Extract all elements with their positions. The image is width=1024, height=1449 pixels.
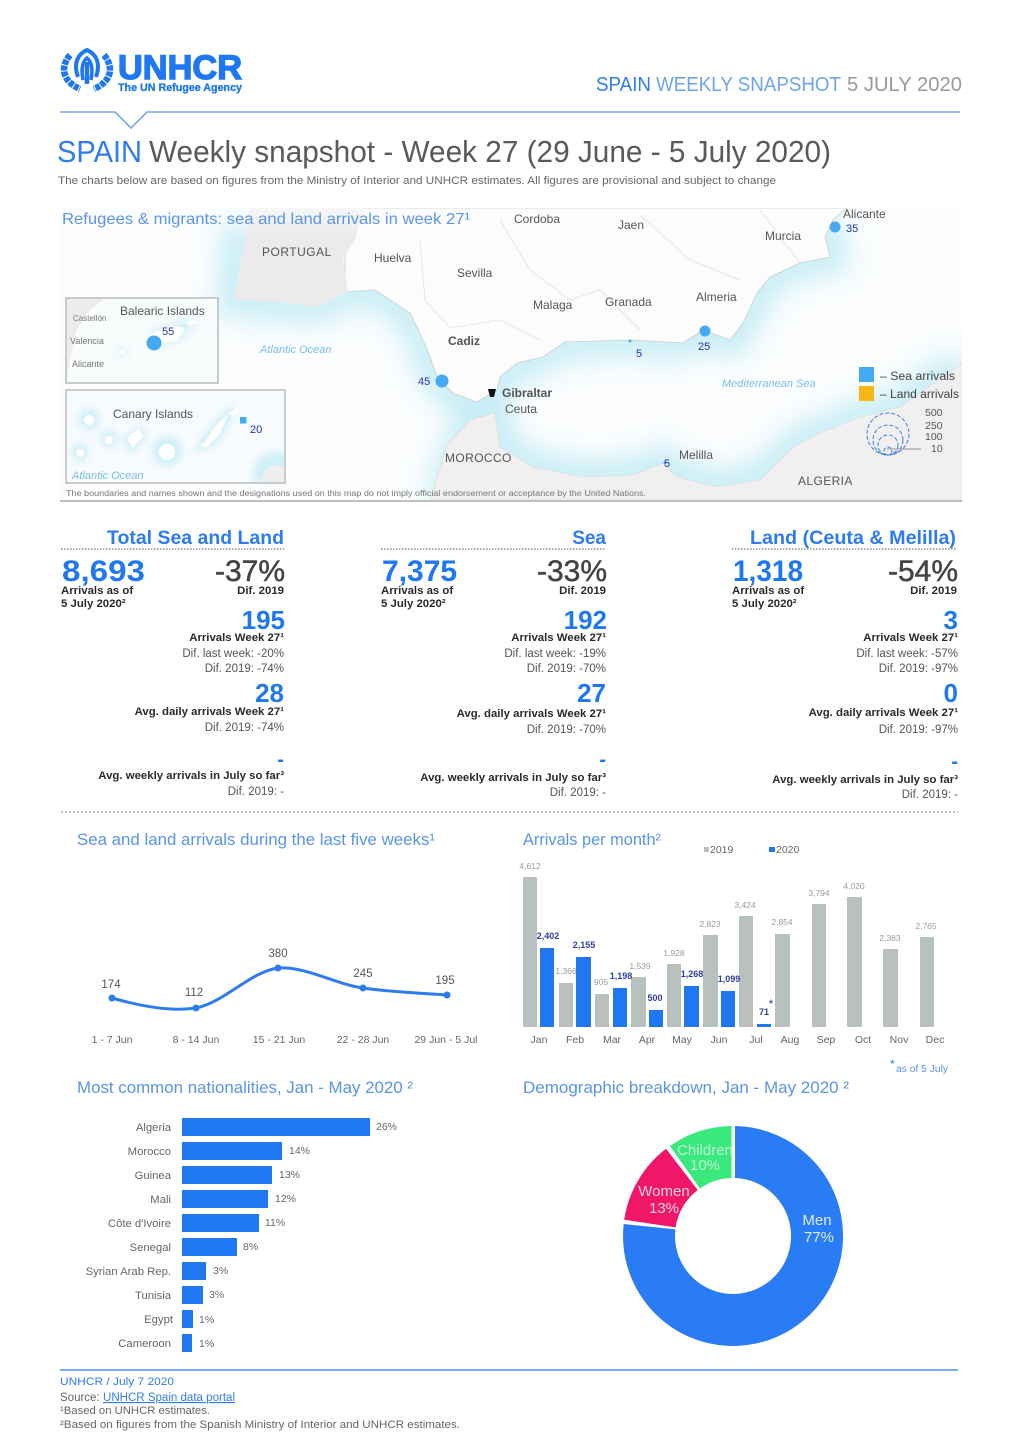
country labels xyxy=(86,1122,174,1350)
week labels: 15 - 21 Jun xyxy=(253,1034,305,1046)
inset: Balearic Islands: 55 xyxy=(162,326,174,338)
bars xyxy=(182,1118,370,1352)
total arrivals: Arrivals as of xyxy=(61,585,133,597)
difference with 2019: Dif. 2019 xyxy=(910,585,957,597)
donut labels: 10% xyxy=(690,1157,720,1174)
average daily arrivals: 0 xyxy=(944,678,958,708)
map legend: 500 xyxy=(925,407,943,419)
percentages: 13% xyxy=(279,1169,300,1181)
header tag: report name and date: WEEKLY SNAPSHOT xyxy=(656,74,841,96)
values 2019: 3,424 xyxy=(734,900,756,910)
land: North Africa xyxy=(430,363,962,500)
weekly arrivals: Dif. last week: -20% xyxy=(182,648,284,660)
panel: sea xyxy=(381,528,607,799)
donut segment: men xyxy=(623,1126,843,1346)
map legend: 100 xyxy=(925,431,943,443)
values: 112 xyxy=(185,987,203,999)
inset: Canary Islands: Atlantic Ocean xyxy=(71,470,144,482)
arrival numbers: 5 xyxy=(636,348,642,360)
panel: total sea and land xyxy=(61,528,285,798)
values xyxy=(101,948,455,999)
map labels: countries and cities xyxy=(259,207,886,488)
total arrivals: 5 July 2020² xyxy=(61,598,126,610)
values: 245 xyxy=(353,968,373,980)
values 2020: 500 xyxy=(647,993,663,1003)
values: 174 xyxy=(101,979,121,991)
map labels: countries and cities: MOROCCO xyxy=(445,451,512,465)
header rule with notch xyxy=(60,112,960,128)
logo wordmark: UNHCR xyxy=(118,49,242,87)
total arrivals xyxy=(732,555,804,610)
difference with 2019: Dif. 2019 xyxy=(559,585,606,597)
total arrivals: Arrivals as of xyxy=(381,585,453,597)
values 2019: 1,539 xyxy=(629,961,651,971)
week labels: 29 Jun - 5 Jul xyxy=(414,1034,478,1046)
average weekly arrivals: Avg. weekly arrivals in July so far³ xyxy=(98,770,284,782)
icon: Gibraltar marker xyxy=(488,389,496,397)
values 2020: 71 xyxy=(759,1007,769,1017)
average daily arrivals: Avg. daily arrivals Week 27¹ xyxy=(135,706,284,718)
weekly arrivals xyxy=(182,605,285,675)
map labels: countries and cities: Murcia xyxy=(765,229,801,243)
panel: land xyxy=(732,528,958,801)
week labels: 22 - 28 Jun xyxy=(337,1034,389,1046)
inset: Canary Islands: 20 xyxy=(250,424,262,436)
total arrivals: 7,375 xyxy=(382,555,457,588)
difference with 2019: Dif. 2019 xyxy=(237,585,284,597)
map legend: – Land arrivals xyxy=(880,389,959,401)
percentages: 3% xyxy=(213,1265,228,1277)
heading: Sea and land arrivals during the last five weeks¹ xyxy=(77,830,435,849)
country labels: Mali xyxy=(150,1194,171,1206)
average weekly arrivals: Avg. weekly arrivals in July so far³ xyxy=(772,774,958,786)
percentages: 12% xyxy=(275,1193,296,1205)
bars 2019 xyxy=(523,877,934,1027)
average daily arrivals: 27 xyxy=(577,678,606,708)
country labels: Egypt xyxy=(144,1314,174,1326)
heading: Demographic breakdown, Jan - May 2020 ² xyxy=(523,1078,849,1097)
percentages: 1% xyxy=(199,1338,214,1350)
weekly arrivals xyxy=(504,605,607,675)
values 2020: 2,402 xyxy=(537,931,559,941)
percentages: 14% xyxy=(289,1145,310,1157)
weekly arrivals: 192 xyxy=(564,605,607,635)
month labels: Jan xyxy=(531,1034,548,1046)
month labels xyxy=(531,1034,944,1046)
week labels: 8 - 14 Jun xyxy=(173,1034,220,1046)
panel: map of sea and land arrivals xyxy=(60,207,962,501)
values 2019: 4,020 xyxy=(843,881,865,891)
map labels: countries and cities: PORTUGAL xyxy=(262,245,332,259)
map labels: countries and cities: Cadiz xyxy=(448,334,480,348)
heading: Land (Ceuta & Melilla) xyxy=(750,528,956,549)
chart: most common nationalities xyxy=(77,1078,413,1352)
total arrivals: 5 July 2020² xyxy=(732,598,797,610)
country labels: Morocco xyxy=(128,1146,171,1158)
chart: arrivals per month xyxy=(519,830,948,1075)
donut labels: Men xyxy=(802,1212,832,1229)
country labels: Tunisia xyxy=(135,1290,172,1302)
country labels: Cameroon xyxy=(118,1338,171,1350)
weekly arrivals: Dif. 2019: -70% xyxy=(527,663,606,675)
logo tagline: The UN Refugee Agency xyxy=(118,82,243,94)
map labels: countries and cities: Melilla xyxy=(679,448,713,462)
map labels: countries and cities: Almeria xyxy=(696,290,737,304)
UNHCR logo xyxy=(64,49,243,94)
values 2020: 1,268 xyxy=(681,969,703,979)
percentages: 11% xyxy=(265,1217,285,1229)
month labels: Apr xyxy=(639,1034,656,1046)
weekly arrivals: Dif. last week: -19% xyxy=(504,648,606,660)
arrival numbers xyxy=(418,223,858,470)
map labels: countries and cities: Granada xyxy=(605,295,652,309)
country labels: Côte d'Ivoire xyxy=(108,1218,171,1230)
values 2020: 2,155 xyxy=(573,940,595,950)
average daily arrivals xyxy=(457,678,606,736)
title: Weekly snapshot - Week 27 (29 June - 5 July 2020) xyxy=(149,134,831,169)
values 2019: 4,612 xyxy=(519,861,541,871)
average daily arrivals: 28 xyxy=(255,678,284,708)
values 2019: 2,854 xyxy=(771,917,793,927)
total arrivals: Arrivals as of xyxy=(732,585,804,597)
percentages: 1% xyxy=(199,1314,214,1326)
values 2019: 3,794 xyxy=(808,888,830,898)
inset: Canary Islands xyxy=(66,390,290,483)
percentages: 3% xyxy=(209,1289,224,1301)
footer credit: UNHCR / July 7 2020 xyxy=(60,1376,174,1388)
month labels: Jul xyxy=(749,1034,763,1046)
map legend: 250 xyxy=(925,420,943,432)
chart: demographic breakdown xyxy=(523,1078,849,1346)
weekly arrivals: Arrivals Week 27¹ xyxy=(863,632,958,644)
map labels: countries and cities: Sevilla xyxy=(457,266,493,280)
inset: Balearic Islands: Balearic Islands xyxy=(120,304,205,318)
values 2020: * xyxy=(769,997,774,1011)
map labels: countries and cities: Mediterranean Sea xyxy=(722,378,816,390)
total arrivals: 1,318 xyxy=(733,555,803,588)
average weekly arrivals: Avg. weekly arrivals in July so far³ xyxy=(420,772,606,784)
inset: Balearic Islands xyxy=(66,298,218,383)
average weekly arrivals: Dif. 2019: - xyxy=(902,789,958,801)
average daily arrivals xyxy=(135,678,284,734)
map labels: countries and cities: Atlantic Ocean xyxy=(259,344,332,356)
total arrivals xyxy=(381,555,457,610)
values: 380 xyxy=(268,948,288,960)
weekly arrivals: 3 xyxy=(944,605,958,635)
difference with 2019: -54% xyxy=(888,555,958,588)
header tag: report name and date: 5 JULY 2020 xyxy=(847,74,962,96)
map labels: countries and cities: ALGERIA xyxy=(798,474,853,488)
donut labels: Children xyxy=(677,1142,733,1159)
average weekly arrivals: - xyxy=(951,751,958,773)
inset: Balearic Islands: Castellón xyxy=(73,314,106,323)
map labels: countries and cities: Jaen xyxy=(618,218,644,232)
bars 2020 xyxy=(540,948,771,1027)
percentages: 26% xyxy=(376,1121,397,1133)
map disclaimer: The boundaries and names shown and the designations used on this map do not imply official endorsement or acceptance by the United Nations. xyxy=(66,489,646,498)
map labels: countries and cities: Malaga xyxy=(533,298,573,312)
difference with 2019: -37% xyxy=(215,555,285,588)
values 2019: 1,366 xyxy=(555,966,577,976)
average daily arrivals: Dif. 2019: -97% xyxy=(879,724,958,736)
values 2019: 2,765 xyxy=(915,921,937,931)
difference with 2019: -33% xyxy=(537,555,607,588)
donut labels: 13% xyxy=(649,1200,679,1217)
map legend: – Sea arrivals xyxy=(880,371,955,383)
average weekly arrivals xyxy=(420,749,606,799)
subtitle: The charts below are based on figures from the Ministry of Interior and UNHCR estimates. All figures are provisional and subject to change xyxy=(58,175,776,187)
legend xyxy=(704,844,800,856)
weekly arrivals xyxy=(856,605,958,675)
arrival markers xyxy=(436,222,840,464)
average daily arrivals: Avg. daily arrivals Week 27¹ xyxy=(457,708,606,720)
values 2020: 1,099 xyxy=(718,974,740,984)
land: Portugal xyxy=(234,208,363,307)
total arrivals xyxy=(61,555,145,610)
month labels: Aug xyxy=(781,1034,799,1046)
values 2020 xyxy=(537,931,774,1017)
footer source: UNHCR Spain data portal xyxy=(103,1392,235,1404)
average weekly arrivals xyxy=(772,751,958,801)
country labels: Syrian Arab Rep. xyxy=(86,1266,171,1278)
heading: Arrivals per month² xyxy=(523,830,661,849)
weekly arrivals: Dif. 2019: -74% xyxy=(205,663,284,675)
map labels: countries and cities: Cordoba xyxy=(514,212,560,226)
chart: arrivals during the last five weeks xyxy=(77,830,478,1046)
donut labels: Women xyxy=(638,1183,690,1200)
month labels: Feb xyxy=(566,1034,584,1046)
arrival numbers: 45 xyxy=(418,376,430,388)
average daily arrivals: Avg. daily arrivals Week 27¹ xyxy=(809,707,958,719)
footnote 1: ¹Based on UNHCR estimates. xyxy=(60,1405,210,1417)
weekly arrivals: 195 xyxy=(242,605,285,635)
heading: Sea xyxy=(572,528,606,549)
average daily arrivals: Dif. 2019: -70% xyxy=(527,724,606,736)
values 2020: 1,198 xyxy=(610,971,632,981)
map legend: 10 xyxy=(931,443,943,455)
land: Spain xyxy=(345,208,847,402)
month labels: Jun xyxy=(711,1034,728,1046)
values: 195 xyxy=(435,975,455,987)
weekly arrivals: Arrivals Week 27¹ xyxy=(511,632,606,644)
week labels: 1 - 7 Jun xyxy=(92,1034,133,1046)
header tag: report name and date xyxy=(596,74,962,96)
line xyxy=(112,968,447,1009)
map labels: countries and cities: Alicante xyxy=(843,207,886,221)
donut labels xyxy=(638,1142,834,1246)
arrival numbers: 25 xyxy=(698,341,710,353)
header tag: report name and date: SPAIN xyxy=(596,74,651,96)
weekly arrivals: Arrivals Week 27¹ xyxy=(189,632,284,644)
values 2019 xyxy=(519,861,937,987)
donut segment: women xyxy=(624,1149,698,1227)
icon: UNHCR emblem xyxy=(64,50,110,89)
legend: 2019 xyxy=(710,844,734,856)
inset: Balearic Islands: Valencia xyxy=(70,336,104,346)
average weekly arrivals: Dif. 2019: - xyxy=(550,787,606,799)
values 2019: 2,383 xyxy=(879,933,901,943)
note: * xyxy=(890,1057,895,1071)
total arrivals: 5 July 2020² xyxy=(381,598,446,610)
donut labels: 77% xyxy=(804,1229,834,1246)
average weekly arrivals: Dif. 2019: - xyxy=(228,786,284,798)
percentages xyxy=(199,1121,397,1350)
note: as of 5 July xyxy=(896,1064,948,1075)
values 2019: 1,928 xyxy=(663,948,685,958)
inset: Balearic Islands: Alicante xyxy=(72,359,104,369)
inset: Canary Islands: Canary Islands xyxy=(113,407,193,421)
month labels: Mar xyxy=(603,1034,622,1046)
country labels: Algeria xyxy=(136,1122,172,1134)
week labels xyxy=(92,1034,478,1046)
heading: Most common nationalities, Jan - May 2020 ² xyxy=(77,1078,413,1097)
month labels: Oct xyxy=(855,1034,871,1046)
values 2019: 905 xyxy=(594,977,608,987)
map legend xyxy=(859,367,959,455)
weekly arrivals: Dif. 2019: -97% xyxy=(879,663,958,675)
month labels: Nov xyxy=(890,1034,909,1046)
month labels: Dec xyxy=(926,1034,944,1046)
arrival numbers: 35 xyxy=(846,223,858,235)
average daily arrivals xyxy=(809,678,958,736)
arrival numbers: 5 xyxy=(664,458,670,470)
country labels: Senegal xyxy=(130,1242,171,1254)
month labels: May xyxy=(672,1034,693,1046)
average weekly arrivals: - xyxy=(599,749,606,771)
average weekly arrivals xyxy=(98,749,284,798)
average daily arrivals: Dif. 2019: -74% xyxy=(205,722,284,734)
percentages: 8% xyxy=(243,1241,258,1253)
map title: Refugees & migrants: sea and land arrivals in week 27¹ xyxy=(62,211,470,228)
internal province borders xyxy=(420,210,800,340)
map labels: countries and cities: Gibraltar xyxy=(502,386,552,400)
average weekly arrivals: - xyxy=(277,749,284,771)
map labels: countries and cities: Huelva xyxy=(374,251,412,265)
donut segment: children xyxy=(670,1126,732,1188)
footnote 2: ²Based on figures from the Spanish Ministry of Interior and UNHCR estimates. xyxy=(60,1419,460,1431)
heading: Total Sea and Land xyxy=(107,528,284,549)
footer source: Source: xyxy=(60,1392,100,1404)
country labels: Guinea xyxy=(135,1170,172,1182)
legend: 2020 xyxy=(776,844,800,856)
map labels: countries and cities: Ceuta xyxy=(505,402,537,416)
title: SPAIN xyxy=(57,134,142,169)
month labels: Sep xyxy=(817,1034,835,1046)
footer xyxy=(60,1370,958,1431)
values 2019: 2,823 xyxy=(699,919,721,929)
weekly arrivals: Dif. last week: -57% xyxy=(856,648,958,660)
total arrivals: 8,693 xyxy=(62,555,145,588)
note xyxy=(890,1057,948,1075)
